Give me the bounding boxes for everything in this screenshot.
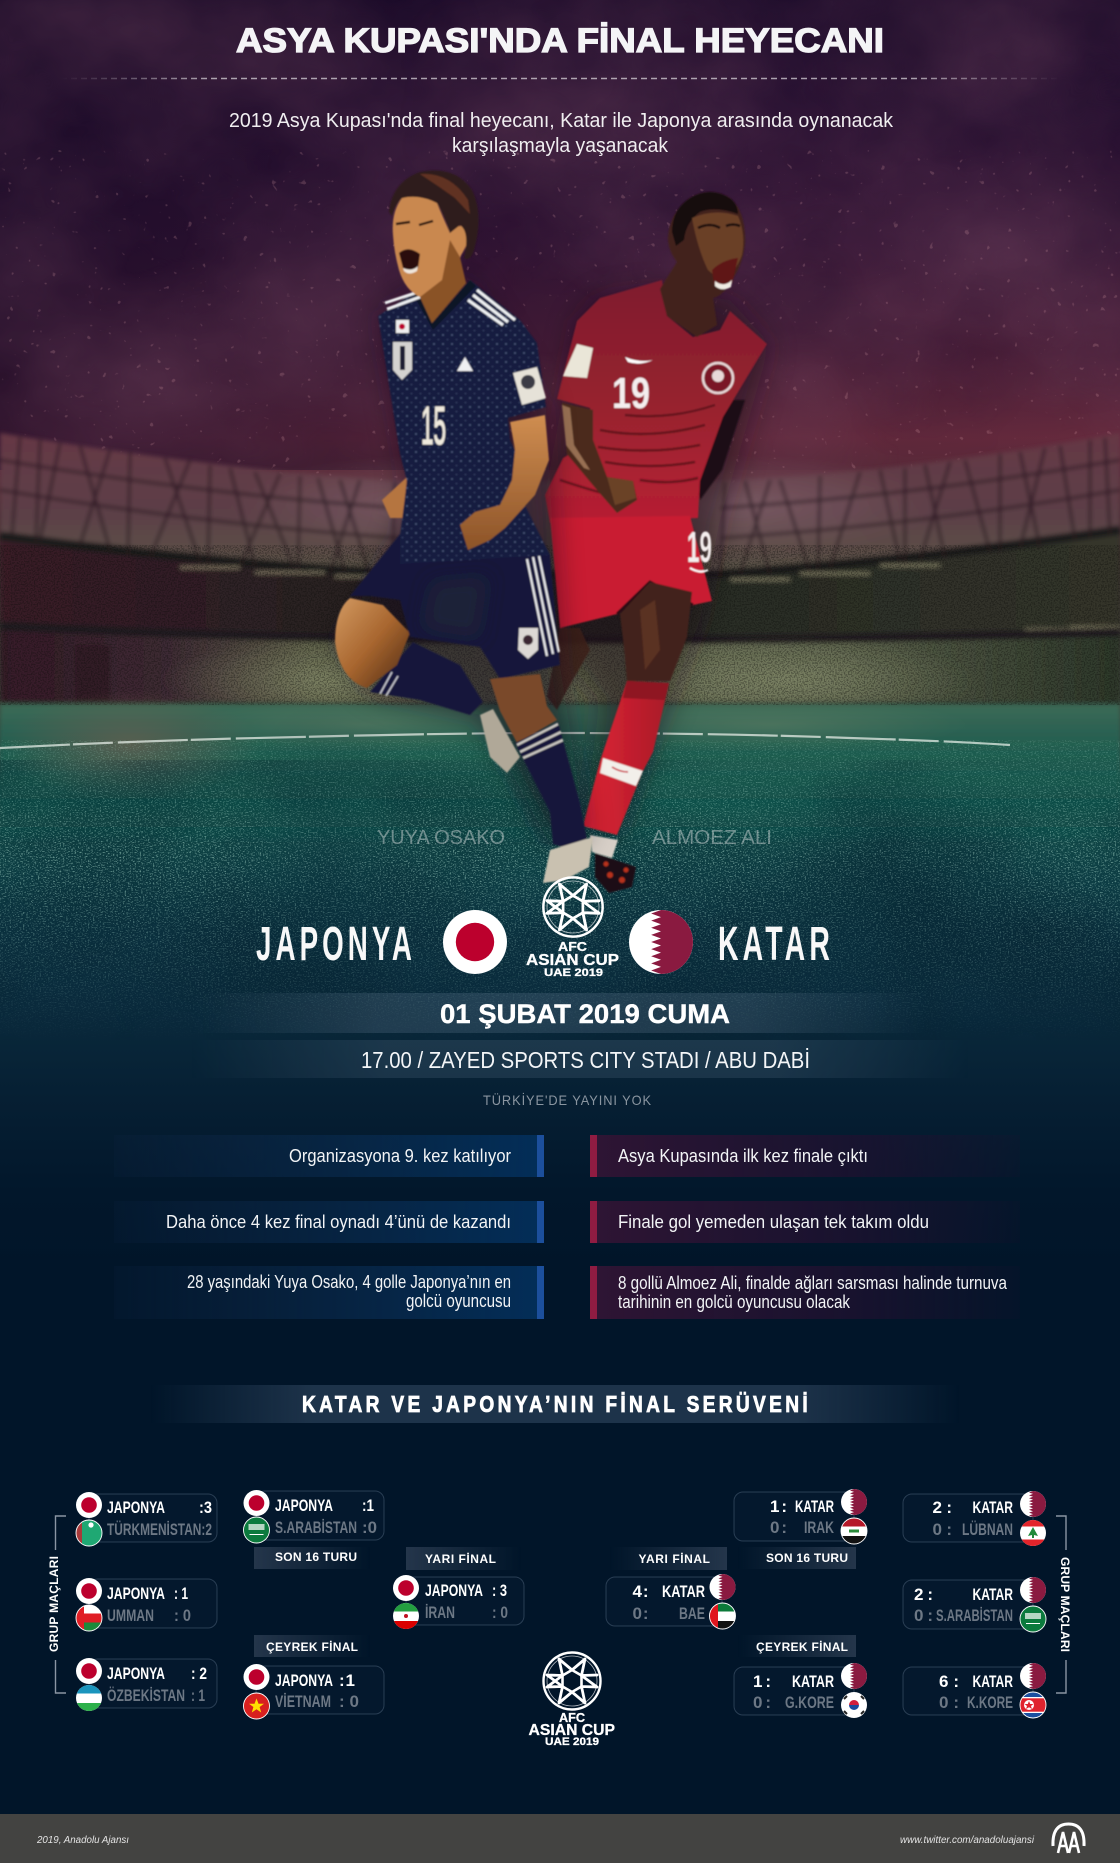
match: Japonya - Türkmenistan: :3 bbox=[199, 1498, 212, 1517]
fact: Japonya 1 bbox=[114, 1135, 544, 1177]
label: Yarı final, Japonya bbox=[406, 1547, 521, 1570]
player name: Almoez Ali: ALMOEZ ALI bbox=[652, 827, 772, 849]
label: Çeyrek final, Japonya bbox=[254, 1635, 370, 1657]
fact: Japonya 3 bbox=[114, 1266, 544, 1319]
match: Japonya - Türkmenistan: JAPONYA bbox=[107, 1498, 165, 1517]
footer bbox=[0, 1814, 1120, 1863]
label: Son 16 turu, Japonya: SON 16 TURU bbox=[275, 1550, 357, 1564]
fact: Japonya 2 bbox=[114, 1201, 544, 1243]
match: Katar - BAE: 4 : bbox=[632, 1582, 648, 1601]
match: Japonya - Özbekistan bbox=[76, 1658, 217, 1711]
fact: Japonya 1: Organizasyona 9. kez katılıyor bbox=[289, 1146, 511, 1166]
player name: Yuya Osako: YUYA OSAKO bbox=[377, 827, 505, 849]
fact: Japonya 2: Daha önce 4 kez final oynadı 4’ünü de kazandı bbox=[166, 1212, 511, 1232]
subtitle bbox=[229, 110, 894, 157]
fact: Katar 2 bbox=[590, 1201, 1020, 1243]
logo: AFC Asian Cup, bracket: ASIAN CUP bbox=[528, 1722, 615, 1739]
match: Katar - G.Kore: 0 : bbox=[753, 1693, 771, 1712]
logo: AFC Asian Cup: ASIAN CUP bbox=[526, 952, 619, 969]
match: Japonya - S.Arabistan: JAPONYA bbox=[275, 1496, 333, 1515]
player: Yuya Osako, Japonya bbox=[335, 170, 593, 883]
match: Katar - Irak bbox=[734, 1489, 868, 1544]
match: Japonya - Umman: JAPONYA bbox=[107, 1584, 165, 1603]
match: Katar - S.Arabistan: 2 : bbox=[914, 1585, 933, 1604]
panel: Katar facts bbox=[590, 1135, 1020, 1319]
match: Katar - BAE: 0 : bbox=[632, 1604, 648, 1623]
match: Katar - K.Kore bbox=[903, 1663, 1047, 1718]
match: Japonya - S.Arabistan: :0 bbox=[362, 1518, 377, 1537]
logo: AFC Asian Cup, bracket: AFC bbox=[559, 1710, 586, 1725]
logo: AFC Asian Cup, bracket: UAE 2019 bbox=[545, 1736, 599, 1748]
player: Almoez Ali, Katar: 19 bbox=[687, 523, 712, 572]
label: Son 16 turu, Katar bbox=[738, 1547, 856, 1569]
match: Katar - BAE: BAE bbox=[679, 1604, 705, 1623]
match: Japonya - Türkmenistan: TÜRKMENİSTAN:2 bbox=[107, 1520, 212, 1539]
match: Katar - BAE bbox=[606, 1574, 736, 1629]
match: Katar - Irak: 0 : bbox=[770, 1518, 787, 1537]
match: Katar - Irak: 1 : bbox=[770, 1497, 787, 1516]
match: Japonya - İran: : 3 bbox=[492, 1581, 507, 1600]
label: Son 16 turu, Katar: SON 16 TURU bbox=[766, 1551, 848, 1565]
match: Japonya - Türkmenistan bbox=[76, 1492, 217, 1546]
icon: Anadolu Ajansı logo bbox=[1053, 1824, 1084, 1853]
match: Japonya - Vietnam: JAPONYA bbox=[275, 1671, 333, 1690]
match: Katar - Lübnan: 2 : bbox=[932, 1498, 952, 1517]
team name: Japonya: JAPONYA bbox=[256, 918, 416, 971]
section heading bbox=[150, 1385, 960, 1423]
label: Son 16 turu, Japonya bbox=[254, 1547, 370, 1569]
match: Katar - K.Kore: K.KORE bbox=[967, 1693, 1013, 1712]
match: Japonya - İran: İRAN bbox=[425, 1603, 455, 1622]
match date band: 01 ŞUBAT 2019 CUMA bbox=[440, 999, 730, 1029]
match venue band bbox=[190, 1040, 970, 1078]
match: Japonya - İran: : 0 bbox=[492, 1603, 508, 1622]
player: Almoez Ali, Katar: 19 bbox=[612, 369, 650, 418]
footer: 2019, Anadolu Ajansı bbox=[36, 1835, 129, 1846]
match: Japonya - Vietnam: VİETNAM bbox=[275, 1692, 331, 1711]
match: Japonya - Özbekistan: JAPONYA bbox=[107, 1664, 165, 1683]
flag: Katar bbox=[629, 910, 695, 974]
match: Katar - G.Kore bbox=[734, 1663, 868, 1718]
fact: Katar 3: tarihinin en golcü oyuncusu olacak bbox=[618, 1292, 851, 1312]
match: Japonya - İran bbox=[393, 1575, 524, 1629]
match: Katar - Irak: IRAK bbox=[804, 1518, 835, 1537]
match: Japonya - Vietnam: : 0 bbox=[339, 1692, 359, 1711]
broadcast note: TÜRKİYE'DE YAYINI YOK bbox=[483, 1091, 652, 1108]
subtitle: 2019 Asya Kupası'nda final heyecanı, Katar ile Japonya arasında oynanacak bbox=[229, 110, 894, 132]
footer: www.twitter.com/anadoluajansi bbox=[900, 1835, 1035, 1846]
panel: Japonya facts bbox=[114, 1135, 544, 1319]
match: Katar - Lübnan: LÜBNAN bbox=[962, 1520, 1013, 1539]
match: Katar - K.Kore: KATAR bbox=[972, 1672, 1013, 1691]
match: Japonya - Umman: : 1 bbox=[174, 1584, 188, 1603]
match: Katar - S.Arabistan: 0 : bbox=[914, 1606, 933, 1625]
player: Yuya Osako, Japonya: 15 bbox=[421, 396, 446, 456]
bracket: Katar group label: GRUP MAÇLARI bbox=[1058, 1557, 1072, 1652]
match: Katar - G.Kore: KATAR bbox=[792, 1672, 834, 1691]
match: Katar - S.Arabistan: KATAR bbox=[972, 1585, 1013, 1604]
bracket: Japonya group label: GRUP MAÇLARI bbox=[47, 1556, 61, 1652]
logo: AFC Asian Cup bbox=[526, 877, 619, 979]
fact: Katar 1: Asya Kupasında ilk kez finale çıktı bbox=[618, 1146, 868, 1166]
label: Çeyrek final, Katar bbox=[738, 1635, 856, 1657]
subtitle: karşılaşmayla yaşanacak bbox=[452, 135, 669, 157]
match: Japonya - İran: JAPONYA bbox=[425, 1581, 483, 1600]
match: Katar - Lübnan: KATAR bbox=[972, 1498, 1013, 1517]
fact: Katar 3: 8 gollü Almoez Ali, finalde ağları sarsması halinde turnuva bbox=[618, 1273, 1008, 1293]
match: Katar - Lübnan: 0 : bbox=[932, 1520, 952, 1539]
label: Yarı final, Katar: YARI FİNAL bbox=[638, 1551, 710, 1566]
match: Japonya - Vietnam: : 1 bbox=[339, 1671, 355, 1690]
match: Japonya - Umman: : 0 bbox=[174, 1606, 191, 1625]
match venue band: 17.00 / ZAYED SPORTS CITY STADI / ABU DABİ bbox=[361, 1047, 810, 1073]
match: Japonya - Umman bbox=[76, 1578, 217, 1632]
match: Japonya - Özbekistan: : 1 bbox=[191, 1686, 205, 1705]
match: Katar - Lübnan bbox=[903, 1491, 1047, 1546]
flag: Japonya bbox=[443, 910, 507, 974]
match: Japonya - Vietnam bbox=[244, 1664, 384, 1719]
match: Japonya - Özbekistan: : 2 bbox=[191, 1664, 207, 1683]
match: Japonya - S.Arabistan: S.ARABİSTAN bbox=[275, 1518, 357, 1537]
fact: Katar 1 bbox=[590, 1135, 1020, 1177]
logo: AFC Asian Cup: UAE 2019 bbox=[544, 967, 603, 979]
team name: Katar: KATAR bbox=[718, 918, 834, 971]
match: Katar - G.Kore: 1 : bbox=[753, 1672, 771, 1691]
title: ASYA KUPASI'NDA FİNAL HEYECANI bbox=[236, 22, 884, 60]
bracket: Katar group label bbox=[1056, 1516, 1072, 1693]
match: Japonya - Umman: UMMAN bbox=[107, 1606, 154, 1625]
label: Çeyrek final, Japonya: ÇEYREK FİNAL bbox=[266, 1639, 358, 1654]
fact: Katar 2: Finale gol yemeden ulaşan tek takım oldu bbox=[618, 1212, 929, 1232]
label: Yarı final, Katar bbox=[610, 1547, 727, 1570]
match: Katar - K.Kore: 6 : bbox=[939, 1672, 959, 1691]
match: Katar - K.Kore: 0 : bbox=[939, 1693, 959, 1712]
logo: AFC Asian Cup, bracket bbox=[528, 1652, 615, 1748]
fact: Japonya 3: golcü oyuncusu bbox=[406, 1291, 511, 1311]
match: Katar - Irak: KATAR bbox=[795, 1497, 834, 1516]
match: Katar - BAE: KATAR bbox=[662, 1582, 705, 1601]
logo: AFC Asian Cup: AFC bbox=[558, 939, 588, 954]
match: Japonya - Özbekistan: ÖZBEKİSTAN bbox=[107, 1686, 185, 1705]
match: Katar - S.Arabistan: S.ARABİSTAN bbox=[936, 1606, 1013, 1625]
dashed divider bbox=[61, 78, 1061, 80]
match: Katar - S.Arabistan bbox=[903, 1577, 1047, 1632]
section heading: KATAR VE JAPONYA’NIN FİNAL SERÜVENİ bbox=[302, 1391, 811, 1417]
match: Japonya - S.Arabistan bbox=[244, 1490, 384, 1543]
match: Katar - G.Kore: G.KORE bbox=[785, 1693, 834, 1712]
label: Yarı final, Japonya: YARI FİNAL bbox=[425, 1551, 496, 1566]
match date band bbox=[190, 993, 930, 1033]
bracket: Japonya group label bbox=[47, 1516, 66, 1693]
fact: Katar 3 bbox=[590, 1266, 1020, 1319]
match: Japonya - S.Arabistan: :1 bbox=[362, 1496, 374, 1515]
player: Almoez Ali, Katar bbox=[545, 192, 770, 893]
fact: Japonya 3: 28 yaşındaki Yuya Osako, 4 golle Japonya’nın en bbox=[187, 1272, 511, 1292]
label: Çeyrek final, Katar: ÇEYREK FİNAL bbox=[756, 1639, 848, 1654]
